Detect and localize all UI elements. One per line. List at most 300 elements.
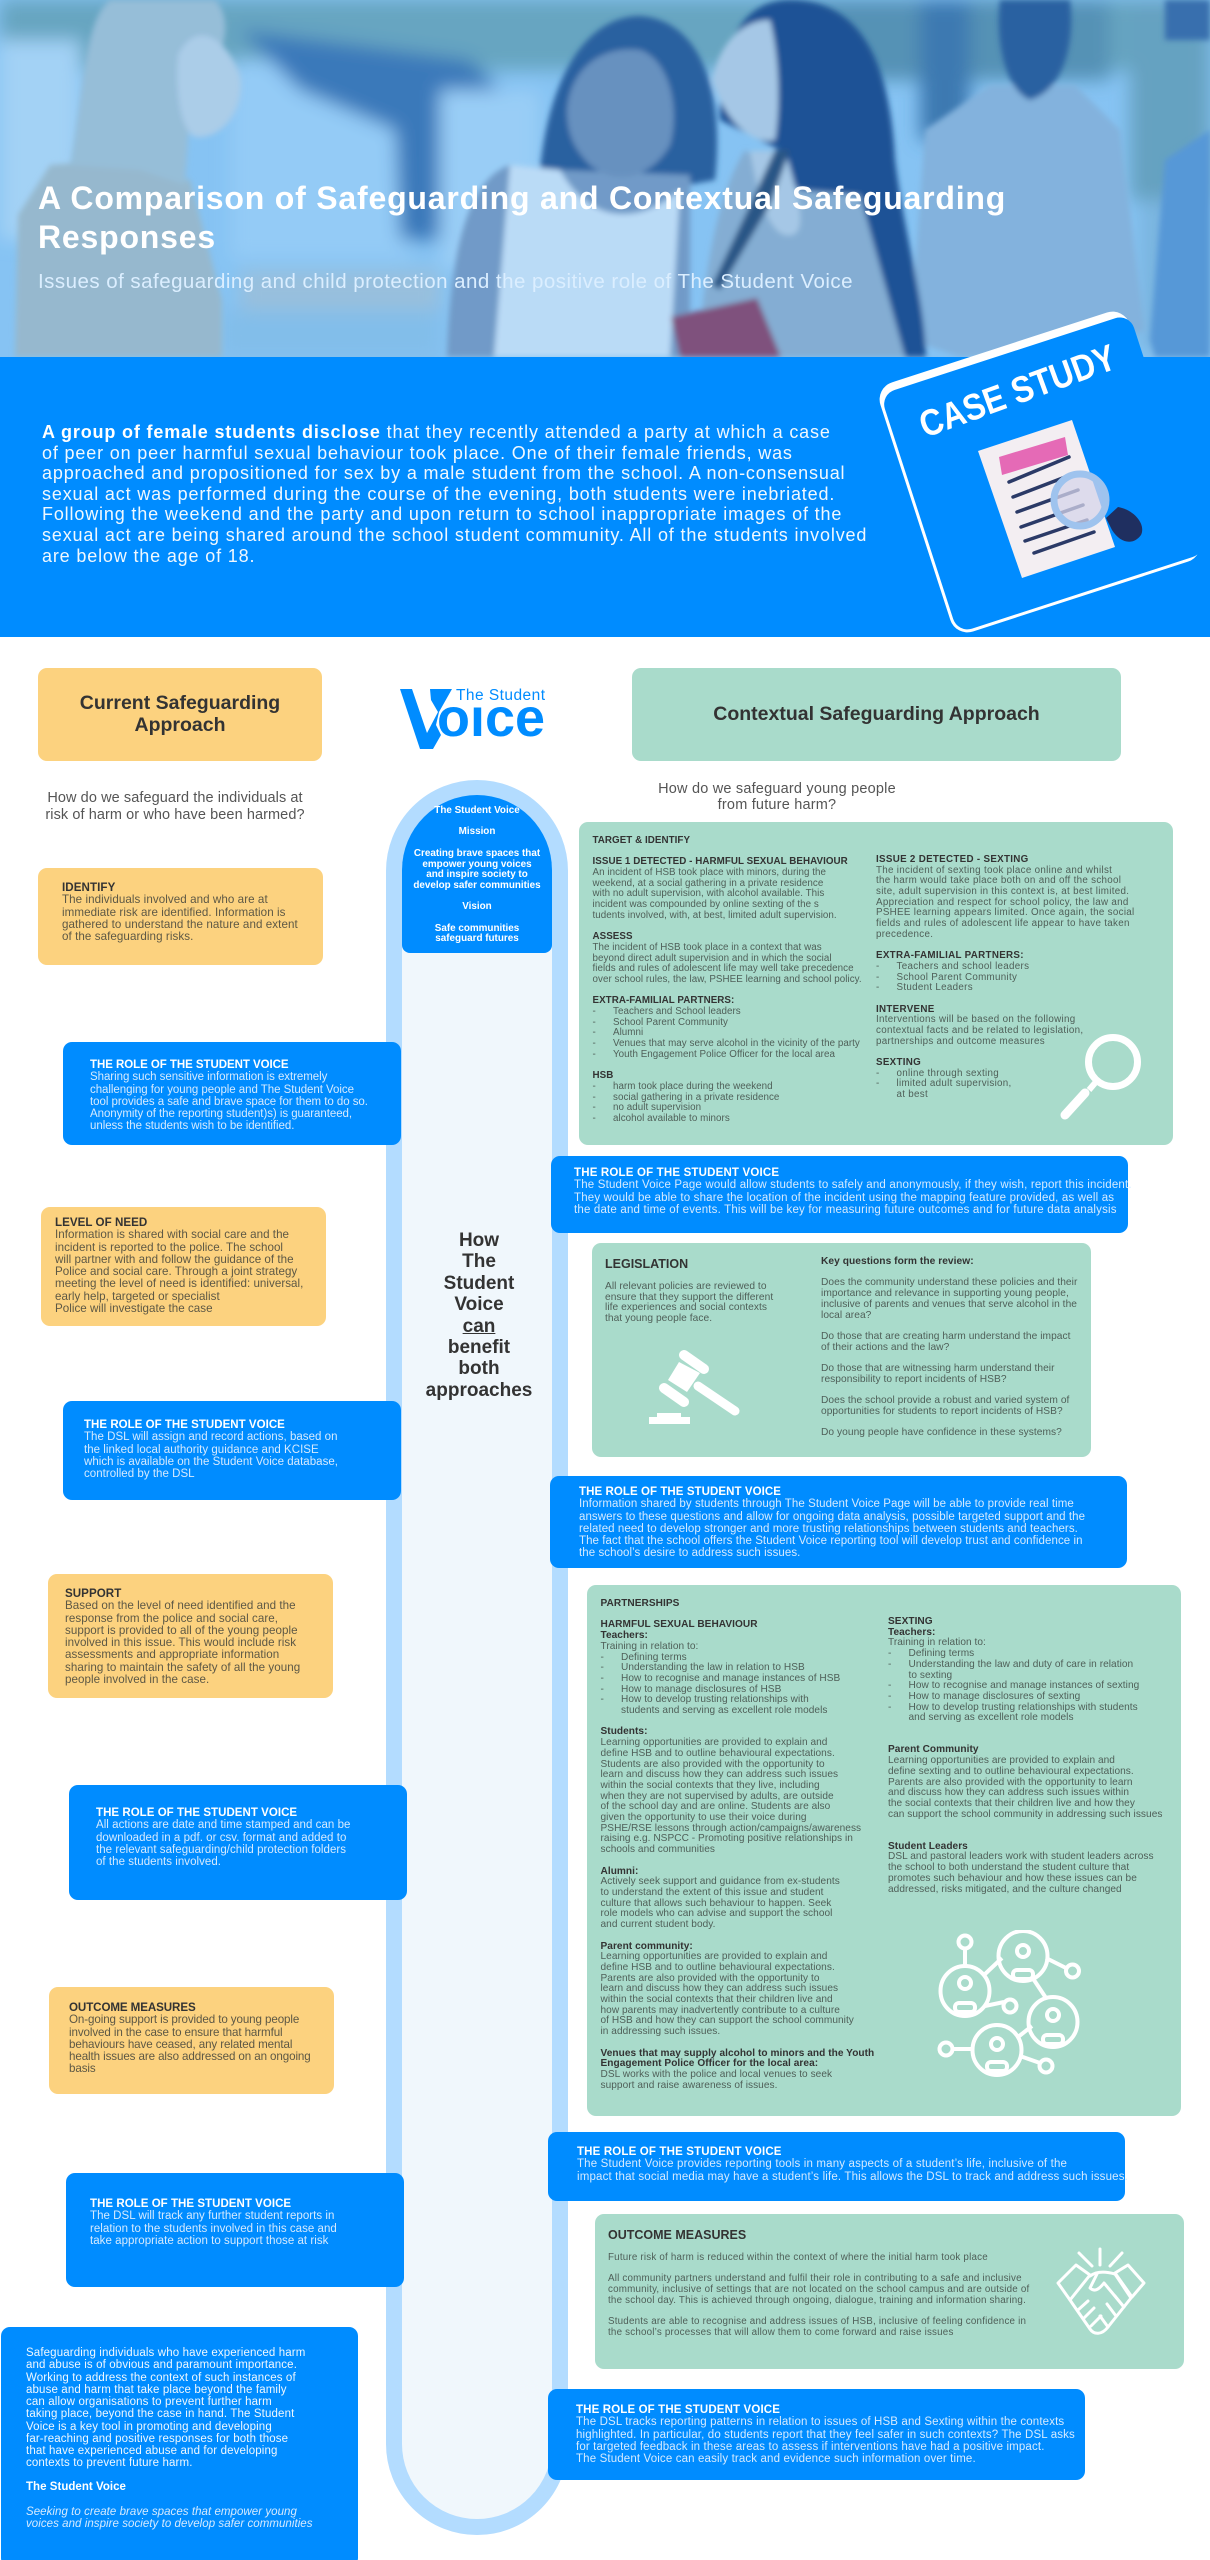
left column: TARGET & IDENTIFY — [592, 835, 690, 846]
left column: Teachers and School leaders — [613, 1006, 741, 1017]
partnerships left column: culture that allows such behaviour to happen. Seek — [600, 1898, 831, 1909]
mission text: Mission — [459, 826, 495, 837]
level of need text: Police will investigate the case — [55, 1302, 213, 1315]
partnerships left column: how parents may inadvertently contribute to a culture — [600, 2005, 840, 2016]
role text 4: relation to the students involved in this case and — [90, 2222, 337, 2234]
panel: support — [48, 1574, 333, 1698]
partnerships left column: and current student body. — [600, 1919, 715, 1930]
right column: ISSUE 2 DETECTED - SEXTING — [876, 854, 1029, 865]
partnerships right column: to sexting — [908, 1670, 952, 1681]
key questions: responsibility to report incidents of HSB? — [821, 1374, 1007, 1385]
partnerships left column: Actively seek support and guidance from ex-students — [600, 1876, 840, 1887]
summary text: Voice is a key tool in promoting and developing — [26, 2420, 272, 2432]
partnerships left column: students and serving as excellent role models — [621, 1705, 827, 1716]
outcome text: the school day. This is achieved through ongoing, dialogue, training and information sharing. — [608, 2295, 1026, 2306]
pill question text: Voice — [454, 1294, 504, 1315]
role text 3: the relevant safeguarding/child protection folders — [96, 1844, 346, 1856]
level of need text: incident is reported to the police. The school — [55, 1240, 283, 1254]
role text right 2: Information shared by students through The Student Voice Page will be able to provide real time — [579, 1498, 1074, 1510]
partnerships left column: given the opportunity to use their voice during — [600, 1812, 807, 1823]
summary text: contexts to prevent future harm. — [26, 2457, 193, 2469]
partnerships right column: can support the school community in addressing such issues — [888, 1809, 1162, 1820]
right column: Interventions will be based on the following — [876, 1014, 1075, 1025]
key questions: Do young people have confidence in these systems? — [821, 1427, 1062, 1438]
identify text: of the safeguarding risks. — [62, 930, 193, 943]
case study text: A group of female students disclose that they recently attended a party at which a case — [42, 422, 831, 442]
question: left — [45, 790, 305, 822]
panel: level of need — [41, 1207, 326, 1326]
role text right 1: the date and time of events. This will be key for measuring future outcomes and for future data analysis — [574, 1204, 1117, 1216]
right column: limited adult supervision, — [896, 1078, 1012, 1089]
right column: contextual facts and be related to legislation, — [876, 1025, 1083, 1036]
left column: over school rules, the law, PSHEE learning and school policy. — [592, 974, 862, 985]
partnerships left column: support and raise awareness of issues. — [600, 2080, 777, 2091]
right column: - — [876, 1068, 880, 1079]
role text 2: the linked local authority guidance and KCISE — [84, 1444, 319, 1456]
right column: at best — [896, 1089, 928, 1100]
pill question text: How — [459, 1230, 499, 1251]
summary text: and abuse is of obvious and paramount importance. — [26, 2359, 297, 2371]
summary text — [26, 2347, 305, 2469]
partnerships right column: - — [888, 1648, 891, 1659]
pill: how the student voice can benefit — [386, 780, 568, 2535]
role text 1: THE ROLE OF THE STUDENT VOICE — [90, 1059, 289, 1071]
key questions: inclusive of parents and venues that serve alcohol in the — [821, 1299, 1077, 1310]
role text 3: All actions are date and time stamped and can be — [96, 1819, 350, 1831]
role text 2: The DSL will assign and record actions, based on — [84, 1431, 338, 1443]
partnerships right column: and serving as excellent role models — [908, 1712, 1074, 1723]
heading text: Current Safeguarding — [80, 692, 280, 714]
left column: ISSUE 1 DETECTED - HARMFUL SEXUAL BEHAVIOUR — [592, 856, 848, 867]
title — [38, 180, 1006, 255]
partnerships left column: define HSB and to outline behavioural expectations. — [600, 1748, 835, 1759]
role text 1: Sharing such sensitive information is extremely — [90, 1071, 327, 1083]
partnerships right column: define sexting and to outline behavioural expectations. — [888, 1766, 1134, 1777]
level of need text: will partner with and follow the guidance of the — [55, 1253, 294, 1266]
role text 1 — [90, 1059, 368, 1132]
case study band — [0, 357, 1210, 637]
partnerships right column: Learning opportunities are provided to explain and — [888, 1755, 1115, 1766]
panel: identify — [38, 868, 323, 965]
level of need text: LEVEL OF NEED — [55, 1216, 147, 1229]
right column: - — [876, 982, 880, 993]
key questions: opportunities for students to report incidents of HSB? — [821, 1406, 1063, 1417]
case study text — [42, 422, 867, 566]
left column: - — [592, 1006, 596, 1017]
role text 1: tool provides a safe and brave space for them to do so. — [90, 1096, 368, 1108]
identify text: The individuals involved and who are at — [62, 893, 268, 906]
title: Responses — [38, 219, 216, 255]
outcome text left: On-going support is provided to young people — [69, 2013, 299, 2026]
right column: - — [876, 972, 880, 983]
right column: The incident of sexting took place online and whilst — [876, 865, 1112, 876]
left column: EXTRA-FAMILIAL PARTNERS: — [592, 995, 734, 1006]
partnerships left column: - — [600, 1684, 604, 1695]
left column: School Parent Community — [613, 1017, 728, 1028]
role text 3: downloaded in a pdf. or csv. format and added to — [96, 1832, 346, 1844]
panel: summary — [1, 2327, 358, 2560]
left column: incident was compounded by online sexting of the s — [592, 899, 819, 910]
partnerships right column: How to develop trusting relationships with students — [908, 1702, 1138, 1713]
case study text: approached and propositioned for sex by a male student from the school. A non-consensual — [42, 463, 845, 483]
icon: gavel — [649, 1350, 740, 1424]
partnerships left column: within the social contexts that they live, including — [600, 1780, 820, 1791]
partnerships left column: of HSB and how they can support the school community — [600, 2015, 854, 2026]
outcome heading: OUTCOME MEASURES — [608, 2228, 746, 2242]
summary text: Working to address the context of such instances of — [26, 2372, 296, 2384]
left column: The incident of HSB took place in a context that was — [592, 942, 822, 953]
partnerships right column: Defining terms — [908, 1648, 974, 1659]
partnerships left column: Defining terms — [621, 1652, 687, 1663]
panel: partnerships — [587, 1585, 1181, 2116]
mission text: safeguard futures — [435, 933, 519, 944]
middle girl — [540, 16, 717, 190]
outcome text: Future risk of harm is reduced within the context of where the initial harm took place — [608, 2252, 988, 2263]
outcome text: community, inclusive of settings that are not located on the school campus and are outside of — [608, 2284, 1029, 2295]
left column: Youth Engagement Police Officer for the local area — [613, 1049, 835, 1060]
outcome text left: OUTCOME MEASURES — [69, 2001, 196, 2014]
level of need text: early help, targeted or specialist — [55, 1290, 220, 1302]
right column: School Parent Community — [896, 972, 1017, 983]
icon: network of people — [938, 1930, 1081, 2077]
case study text: Following the weekend and the party and upon return to school inappropriate images of the — [42, 504, 842, 524]
partnerships right column: Teachers: — [888, 1627, 935, 1638]
mission text: and inspire society to — [426, 869, 528, 880]
role text right 3: THE ROLE OF THE STUDENT VOICE — [577, 2146, 782, 2158]
partnerships left column: Venues that may supply alcohol to minors and the Youth — [600, 2048, 874, 2059]
left column: HSB — [592, 1070, 613, 1081]
pill question text: approaches — [426, 1380, 532, 1401]
role text 4: THE ROLE OF THE STUDENT VOICE — [90, 2198, 291, 2210]
icon: handshake — [1056, 2248, 1146, 2335]
summary text: Safeguarding individuals who have experienced harm — [26, 2347, 305, 2359]
legislation text: life experiences and social contexts — [605, 1302, 767, 1313]
partnerships left column: Parent community: — [600, 1940, 693, 1952]
partnerships left column: PARTNERSHIPS — [600, 1598, 679, 1609]
role text right 1: They would be able to share the location of the incident using the mapping feature provided, as well as — [574, 1192, 1114, 1204]
partnerships left column: Understanding the law in relation to HSB — [621, 1662, 805, 1673]
role text right 4 — [576, 2404, 1075, 2465]
partnerships left column: Alumni: — [600, 1866, 638, 1877]
partnerships right column: How to recognise and manage instances of sexting — [908, 1680, 1139, 1691]
role text right 4: The DSL tracks reporting patterns in relation to issues of HSB and Sexting within the contexts — [576, 2416, 1064, 2428]
partnerships left column: of the school day and are online. Students are also — [600, 1801, 830, 1812]
panel: outcome measures left — [49, 1987, 334, 2094]
partnerships left column: in addressing such issues. — [600, 2026, 720, 2037]
legislation text — [605, 1281, 774, 1324]
summary tagline — [26, 2506, 313, 2530]
partnerships right column: the social contexts that their children live and how they — [888, 1798, 1135, 1809]
left column: - — [592, 1049, 596, 1060]
left column — [592, 835, 862, 1124]
role text 3: THE ROLE OF THE STUDENT VOICE — [96, 1807, 297, 1819]
right man — [910, 85, 1145, 357]
mission panel — [402, 795, 552, 953]
role text 4: The DSL will track any further student reports in — [90, 2210, 334, 2222]
partnerships left column: How to manage disclosures of HSB — [621, 1684, 781, 1695]
partnerships right column: - — [888, 1702, 891, 1713]
partnerships left column — [600, 1598, 874, 2091]
case study text: of peer on peer harmful sexual behaviour took place. One of their female friends, was — [42, 443, 793, 463]
panel: role of student voice 2 — [63, 1401, 401, 1500]
heading text — [80, 692, 280, 736]
mission text: Vision — [462, 901, 492, 912]
outcome text — [608, 2252, 1030, 2338]
left column: - — [592, 1113, 596, 1124]
partnerships right column: Parent Community — [888, 1744, 979, 1755]
legislation text: that young people face. — [605, 1313, 712, 1324]
key questions: Does the community understand these policies and their — [821, 1277, 1077, 1288]
left column: - — [592, 1038, 596, 1049]
left column: alcohol available to minors — [613, 1113, 730, 1124]
panel: target and identify — [579, 822, 1173, 1145]
summary text: taking place, beyond the case in hand. The Student — [26, 2408, 294, 2420]
level of need text: meeting the level of need is identified: universal, — [55, 1277, 303, 1290]
outcome text left: involved in the case to ensure that harmful — [69, 2026, 283, 2038]
support text — [65, 1587, 300, 1686]
title: A Comparison of Safeguarding and Contextual Safeguarding — [38, 180, 1006, 216]
role text 1: unless the students wish to be identified. — [90, 1120, 294, 1132]
role text 2: THE ROLE OF THE STUDENT VOICE — [84, 1419, 285, 1431]
outcome text: the school’s processes that will allow them to come forward and raise issues — [608, 2327, 954, 2338]
right column: partnerships and outcome measures — [876, 1036, 1045, 1047]
left column: Alumni — [613, 1027, 643, 1038]
role text right 4: highlighted. In particular, do students report that they feel safer in such contexts? The DSL asks — [576, 2428, 1075, 2440]
left column: - — [592, 1081, 596, 1092]
right column: precedence. — [876, 929, 933, 940]
panel: role of student voice right 2 — [550, 1476, 1127, 1568]
role text 2: which is available on the Student Voice database, — [84, 1456, 338, 1468]
role text right 4: for targeted feedback in these areas to assess if interventions have had a positive impact. — [576, 2441, 1045, 2453]
mission text: Safe communities — [435, 923, 519, 934]
partnerships left column: DSL works with the police and local venues to seek — [600, 2069, 832, 2080]
logo: The Student — [456, 687, 546, 704]
outcome text: All community partners understand and fulfil their role in contributing to a safe and inclusive — [608, 2273, 1022, 2284]
role text right 1: The Student Voice Page would allow students to safely and anonymously, if they wish, report this incident. — [574, 1179, 1132, 1191]
book — [671, 298, 781, 357]
pill question text — [426, 1230, 532, 1401]
mission text: Creating brave spaces that — [414, 848, 540, 859]
case study card: CASE STUDY — [914, 336, 1122, 446]
right column — [876, 854, 1135, 1100]
right column: PSHEE learning appears limited. Once again, the social — [876, 907, 1135, 918]
partnerships left column: define HSB and to outline behavioural expectations. — [600, 1962, 835, 1973]
subtitle: Issues of safeguarding and child protection and the positive role of The Student Voice — [38, 270, 853, 293]
right column: Teachers and school leaders — [896, 961, 1029, 972]
outcome text left: behaviours have ceased, any related mental — [69, 2038, 292, 2051]
level of need text: Information is shared with social care and the — [55, 1228, 289, 1241]
partnerships right column: - — [888, 1691, 891, 1702]
role text right 1: THE ROLE OF THE STUDENT VOICE — [574, 1167, 779, 1179]
role text right 2: the school’s desire to address such issues. — [579, 1547, 800, 1559]
support text: people involved in the case. — [65, 1673, 209, 1686]
mission text: develop safer communities — [413, 880, 541, 891]
left column: harm took place during the weekend — [613, 1081, 773, 1092]
role text 1: challenging for young people and The Student Voice — [90, 1084, 354, 1096]
case study card — [880, 312, 1198, 632]
summary text: can allow organisations to prevent further harm — [26, 2396, 272, 2408]
left column: no adult supervision — [613, 1102, 701, 1113]
partnerships left column: role models who can advise and support the school — [600, 1908, 832, 1919]
role text right 1 — [574, 1167, 1132, 1216]
role text right 2: answers to these questions and allow for ongoing data analysis, possible targeted support and the — [579, 1510, 1085, 1522]
left column: An incident of HSB took place with minors, during the — [592, 867, 826, 878]
right column: Appreciation and respect for school policy, the law and — [876, 897, 1129, 908]
partnerships right column: Student Leaders — [888, 1841, 968, 1852]
header photo — [0, 0, 1210, 357]
partnerships left column: Learning opportunities are provided to explain and — [600, 1737, 827, 1748]
mission text — [413, 805, 541, 944]
role text 1: Anonymity of the reporting student)s) is guaranteed, — [90, 1108, 352, 1120]
identify text: immediate risk are identified. Information is — [62, 906, 286, 918]
left column: tudents involved, with, at best, limited adult supervision. — [592, 910, 837, 921]
summary tagline: voices and inspire society to develop safer communities — [26, 2518, 313, 2530]
panel: role of student voice 3 — [69, 1785, 407, 1900]
question: left: How do we safeguard the individuals at — [47, 790, 303, 806]
panel: role of student voice 4 — [66, 2173, 404, 2287]
role text right 4: The Student Voice can easily track and evidence such information over time. — [576, 2453, 976, 2465]
role text right 2: The fact that the school offers the Student Voice reporting tool will develop trust and confidence in — [579, 1535, 1083, 1547]
summary sign-off: The Student Voice — [26, 2481, 126, 2493]
outcome text left — [69, 2001, 311, 2075]
identify text: gathered to understand the nature and extent — [62, 918, 298, 931]
partnerships left column: - — [600, 1694, 604, 1705]
legislation text: All relevant policies are reviewed to — [605, 1281, 767, 1292]
summary text: abuse and harm that take place beyond the family — [26, 2384, 287, 2396]
left column: - — [592, 1092, 596, 1102]
heading text: Contextual Safeguarding Approach — [713, 703, 1040, 725]
legislation text: ensure that they support the different — [605, 1292, 773, 1303]
partnerships left column: - — [600, 1673, 604, 1684]
pill question text: can — [463, 1316, 495, 1337]
right column: SEXTING — [876, 1057, 921, 1068]
left column: weekend, at a social gathering in a private residence — [592, 878, 823, 889]
partnerships left column: Parents are also provided with the opportunity to — [600, 1973, 820, 1984]
level of need text: Police and social care. Through a joint strategy — [55, 1265, 297, 1278]
question: right: How do we safeguard young people — [658, 781, 896, 797]
left column: beyond direct adult supervision and in which the social — [592, 953, 832, 964]
right column: Student Leaders — [896, 982, 973, 993]
right column: site, adult supervision in this context is, at best limited. — [876, 886, 1129, 897]
right column: - — [876, 961, 880, 972]
partnerships left column: - — [600, 1652, 604, 1663]
role text 4 — [90, 2198, 337, 2247]
partnerships left column: learn and discuss how they can address such issues — [600, 1983, 838, 1994]
support text: sharing to maintain the safety of all the young — [65, 1660, 300, 1674]
partnerships right column: the school to both understand the student culture that — [888, 1862, 1129, 1873]
right column: EXTRA-FAMILIAL PARTNERS: — [876, 950, 1024, 961]
partnerships left column: to understand the extent of this issue and student — [600, 1887, 824, 1898]
key questions: of their actions and the law? — [821, 1342, 949, 1353]
role text right 3: The Student Voice provides reporting tools in many aspects of a student’s life, inclusive of the — [577, 2158, 1067, 2170]
question: left: risk of harm or who have been harmed? — [45, 806, 305, 822]
role text 3 — [96, 1807, 350, 1868]
legislation heading: LEGISLATION — [605, 1257, 688, 1271]
left column: with no adult supervision, with alcohol available. This — [592, 888, 824, 899]
key questions: importance and relevance in supporting young people, — [821, 1288, 1069, 1299]
mission text: The Student Voice — [434, 805, 520, 816]
role text right 2 — [579, 1486, 1085, 1559]
mission text: empower young voices — [422, 859, 532, 870]
partnerships right column: and discuss how they can address such issues within — [888, 1787, 1129, 1798]
outcome text left: health issues are also addressed on an ongoing — [69, 2050, 311, 2063]
role text right 2: related need to develop stronger and more trusting relationships between students and teachers. — [579, 1523, 1078, 1535]
pill question text: The — [462, 1251, 496, 1272]
support text: response from the police and social care, — [65, 1612, 278, 1624]
summary text: far-reaching and positive responses for both those — [26, 2433, 288, 2445]
partnerships right column: - — [888, 1659, 891, 1670]
long hair girl — [720, 0, 926, 357]
left girl — [15, 160, 222, 357]
partnerships right column: promotes such behaviour and how these issues can be — [888, 1873, 1137, 1884]
partnerships left column: Engagement Police Officer for the local area: — [600, 2058, 818, 2069]
role text 2: controlled by the DSL — [84, 1468, 195, 1480]
support text: support is provided to all of the young people — [65, 1624, 298, 1637]
panel: legislation — [592, 1243, 1091, 1457]
partnerships left column: Training in relation to: — [600, 1641, 698, 1652]
partnerships left column: Students are also provided with the opportunity to — [600, 1759, 825, 1770]
partnerships left column: schools and communities — [600, 1844, 715, 1855]
role text right 3: impact that social media may have a student’s life. This allows the DSL to track and address such issues. — [577, 2170, 1128, 2182]
support text: assessments and appropriate information — [65, 1648, 279, 1661]
summary text: that have experienced abuse and for developing — [26, 2445, 278, 2457]
left column: social gathering in a private residence — [613, 1092, 779, 1102]
key questions: Does the school provide a robust and varied system of — [821, 1395, 1069, 1406]
right column: the harm would take place both on and off the school — [876, 875, 1121, 886]
identify text: IDENTIFY — [62, 881, 115, 894]
panel: current safeguarding heading — [38, 668, 322, 761]
case study text: sexual act are being shared around the school student community. All of the students involved — [42, 525, 867, 545]
support text: involved in this issue. This would include risk — [65, 1636, 296, 1649]
left column: - — [592, 1102, 596, 1113]
partnerships right column: Understanding the law and duty of care in relation — [908, 1659, 1133, 1670]
partnerships left column: raising e.g. NSPCC - Promoting positive relationships in — [600, 1833, 853, 1844]
role text right 4: THE ROLE OF THE STUDENT VOICE — [576, 2404, 780, 2416]
summary tagline: Seeking to create brave spaces that empower young — [26, 2506, 297, 2518]
partnerships left column: - — [600, 1662, 604, 1673]
key questions: local area? — [821, 1310, 871, 1321]
key questions: Key questions form the review: — [821, 1256, 974, 1267]
key questions — [821, 1256, 1078, 1438]
panel: role of student voice 1 — [63, 1042, 401, 1145]
role text 3: of the students involved. — [96, 1856, 221, 1868]
partnerships left column: Learning opportunities are provided to explain and — [600, 1951, 827, 1962]
left column: ASSESS — [592, 931, 633, 942]
key questions: Do those that are witnessing harm understand their — [821, 1363, 1055, 1374]
partnerships left column: Teachers: — [600, 1630, 648, 1641]
pill question text: Student — [444, 1273, 514, 1294]
panel: contextual safeguarding heading — [632, 668, 1121, 761]
role text right 2: THE ROLE OF THE STUDENT VOICE — [579, 1486, 781, 1498]
partnerships right column: SEXTING — [888, 1616, 933, 1627]
level of need text — [55, 1216, 303, 1315]
left column: Venues that may serve alcohol in the vicinity of the party — [613, 1038, 860, 1049]
partnerships left column: How to recognise and manage instances of HSB — [621, 1673, 840, 1684]
panel: outcome measures right — [595, 2214, 1184, 2369]
partnerships left column: within the social contexts that their children live and — [600, 1994, 833, 2005]
partnerships right column: - — [888, 1680, 891, 1691]
support text: SUPPORT — [65, 1587, 121, 1600]
right column: fields and rules of adolescent life appear to have taken — [876, 918, 1130, 929]
identify text — [62, 881, 298, 943]
partnerships right column: How to manage disclosures of sexting — [908, 1691, 1080, 1702]
left column: fields and rules of adolescent life may well take precedence — [592, 963, 854, 974]
case study text: are below the age of 18. — [42, 546, 255, 566]
partnerships left column: Students: — [600, 1726, 648, 1737]
pill question text: benefit — [448, 1337, 510, 1358]
partnerships right column: Parents are also provided with the opportunity to learn — [888, 1777, 1133, 1788]
question: right — [658, 781, 896, 813]
